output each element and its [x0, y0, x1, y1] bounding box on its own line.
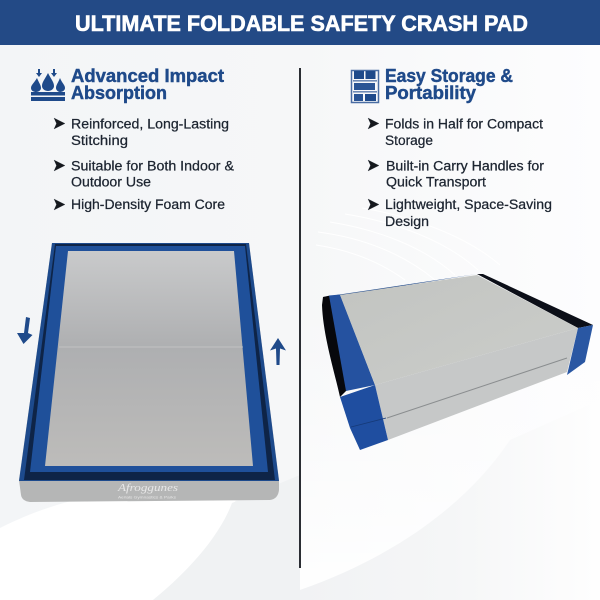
vertical divider — [299, 68, 301, 568]
panel: storage and portability — [352, 66, 552, 229]
bullet list: Outdoor Use — [71, 174, 151, 190]
bullet list: Built-in Carry Handles for — [386, 158, 545, 174]
arrow: fold up — [270, 338, 286, 365]
brand mark on pad: Aerials Gymnastics & Parks — [118, 496, 176, 500]
heading — [385, 66, 513, 103]
bullet list: Stitching — [71, 133, 128, 148]
bullet list: Folds in Half for Compact — [385, 116, 543, 132]
title: ULTIMATE FOLDABLE SAFETY CRASH PAD — [75, 11, 528, 36]
bullet list: Lightweight, Space-Saving — [385, 197, 552, 212]
heading: Advanced Impact — [71, 66, 224, 86]
bullet list: Storage — [385, 133, 433, 148]
heading: Absorption — [71, 83, 167, 103]
bullet list — [368, 116, 552, 229]
bullet list: Design — [385, 214, 429, 229]
bullet list: Reinforced, Long-Lasting — [71, 116, 229, 132]
icon: storage shelves — [352, 70, 378, 102]
arrow: fold down — [17, 317, 32, 344]
bullet list: Quick Transport — [386, 174, 486, 190]
folded crash pad — [322, 274, 593, 450]
heading: Easy Storage & — [385, 66, 513, 86]
bullet list: High-Density Foam Core — [71, 197, 225, 212]
heading: Portability — [385, 83, 476, 103]
bullet list — [54, 116, 234, 212]
brand mark on pad — [117, 482, 178, 500]
bullet list: Suitable for Both Indoor & — [71, 158, 234, 174]
brand mark on pad: Afroggunes — [117, 482, 178, 494]
title banner — [0, 0, 600, 45]
panel: impact absorption — [31, 66, 234, 212]
heading — [71, 66, 224, 103]
unfolded crash pad — [19, 243, 279, 502]
icon: water drops over layers — [31, 69, 65, 101]
